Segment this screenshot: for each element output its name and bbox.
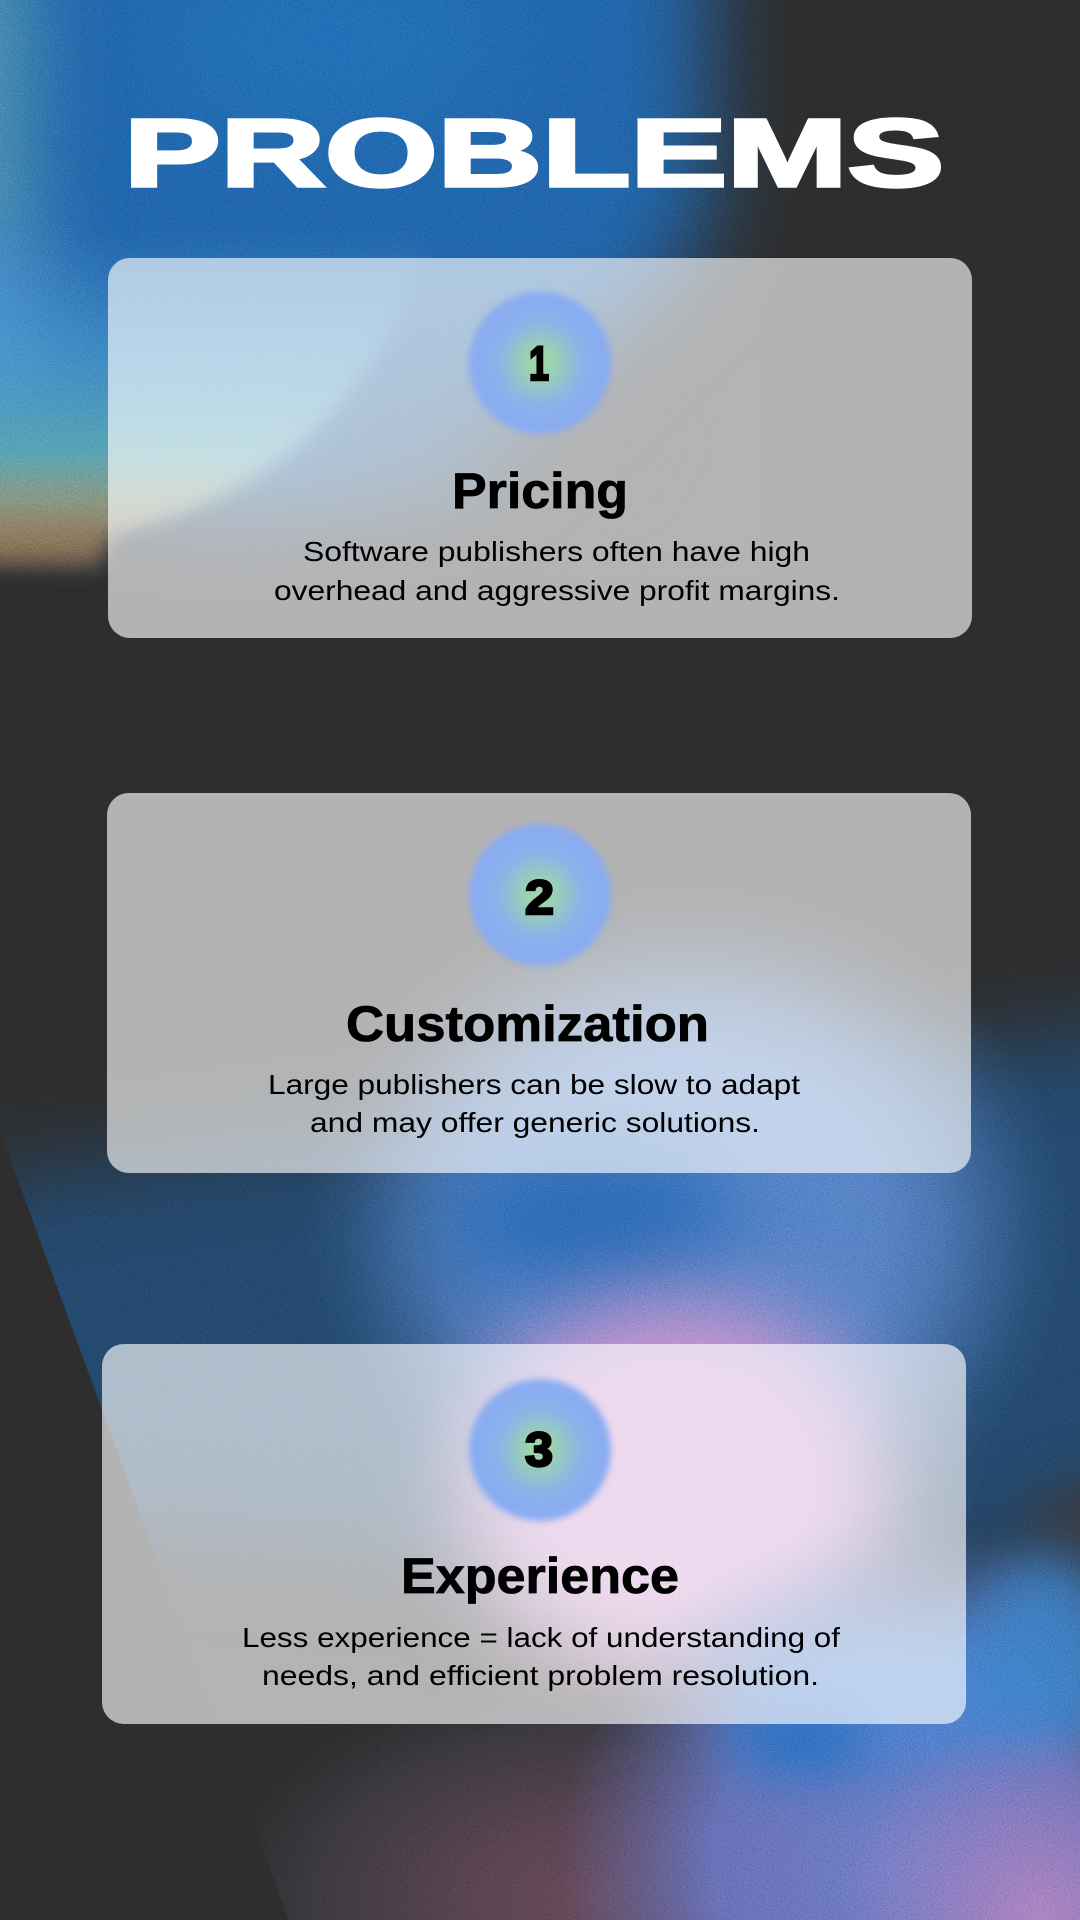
card background: experience [102, 1344, 966, 1724]
text: pricing description [274, 536, 840, 606]
text: customization description [268, 1069, 800, 1138]
text: pricing description: Software publishers often have high [303, 536, 810, 567]
heading: pricing: Pricing [452, 463, 628, 519]
title: PROBLEMS [124, 100, 944, 207]
panel: customization [107, 793, 971, 1173]
panel: pricing [108, 258, 972, 638]
text: experience description: needs, and efficient problem resolution. [262, 1660, 819, 1691]
text: experience description [242, 1622, 840, 1691]
icon: number 1 orb: 1 [529, 338, 549, 391]
text: customization description: and may offer generic solutions. [310, 1107, 760, 1138]
background gradient: lower wedge [0, 890, 1080, 1920]
icon: number 2 orb [469, 824, 611, 966]
icon: number 1 orb [469, 292, 611, 434]
card background: pricing [108, 258, 972, 638]
card background: customization [107, 793, 971, 1173]
heading: experience: Experience [401, 1548, 679, 1604]
heading: customization: Customization [346, 996, 709, 1052]
icon: number 2 orb: 2 [525, 872, 554, 925]
background gradient: top blue glow [0, 0, 708, 566]
text: experience description: Less experience = lack of understanding of [242, 1622, 840, 1653]
text: pricing description: overhead and aggressive profit margins. [274, 575, 840, 606]
text: customization description: Large publishers can be slow to adapt [268, 1069, 800, 1100]
icon: number 3 orb [469, 1379, 611, 1521]
panel: experience [102, 1344, 966, 1724]
icon: number 3 orb: 3 [525, 1424, 553, 1477]
